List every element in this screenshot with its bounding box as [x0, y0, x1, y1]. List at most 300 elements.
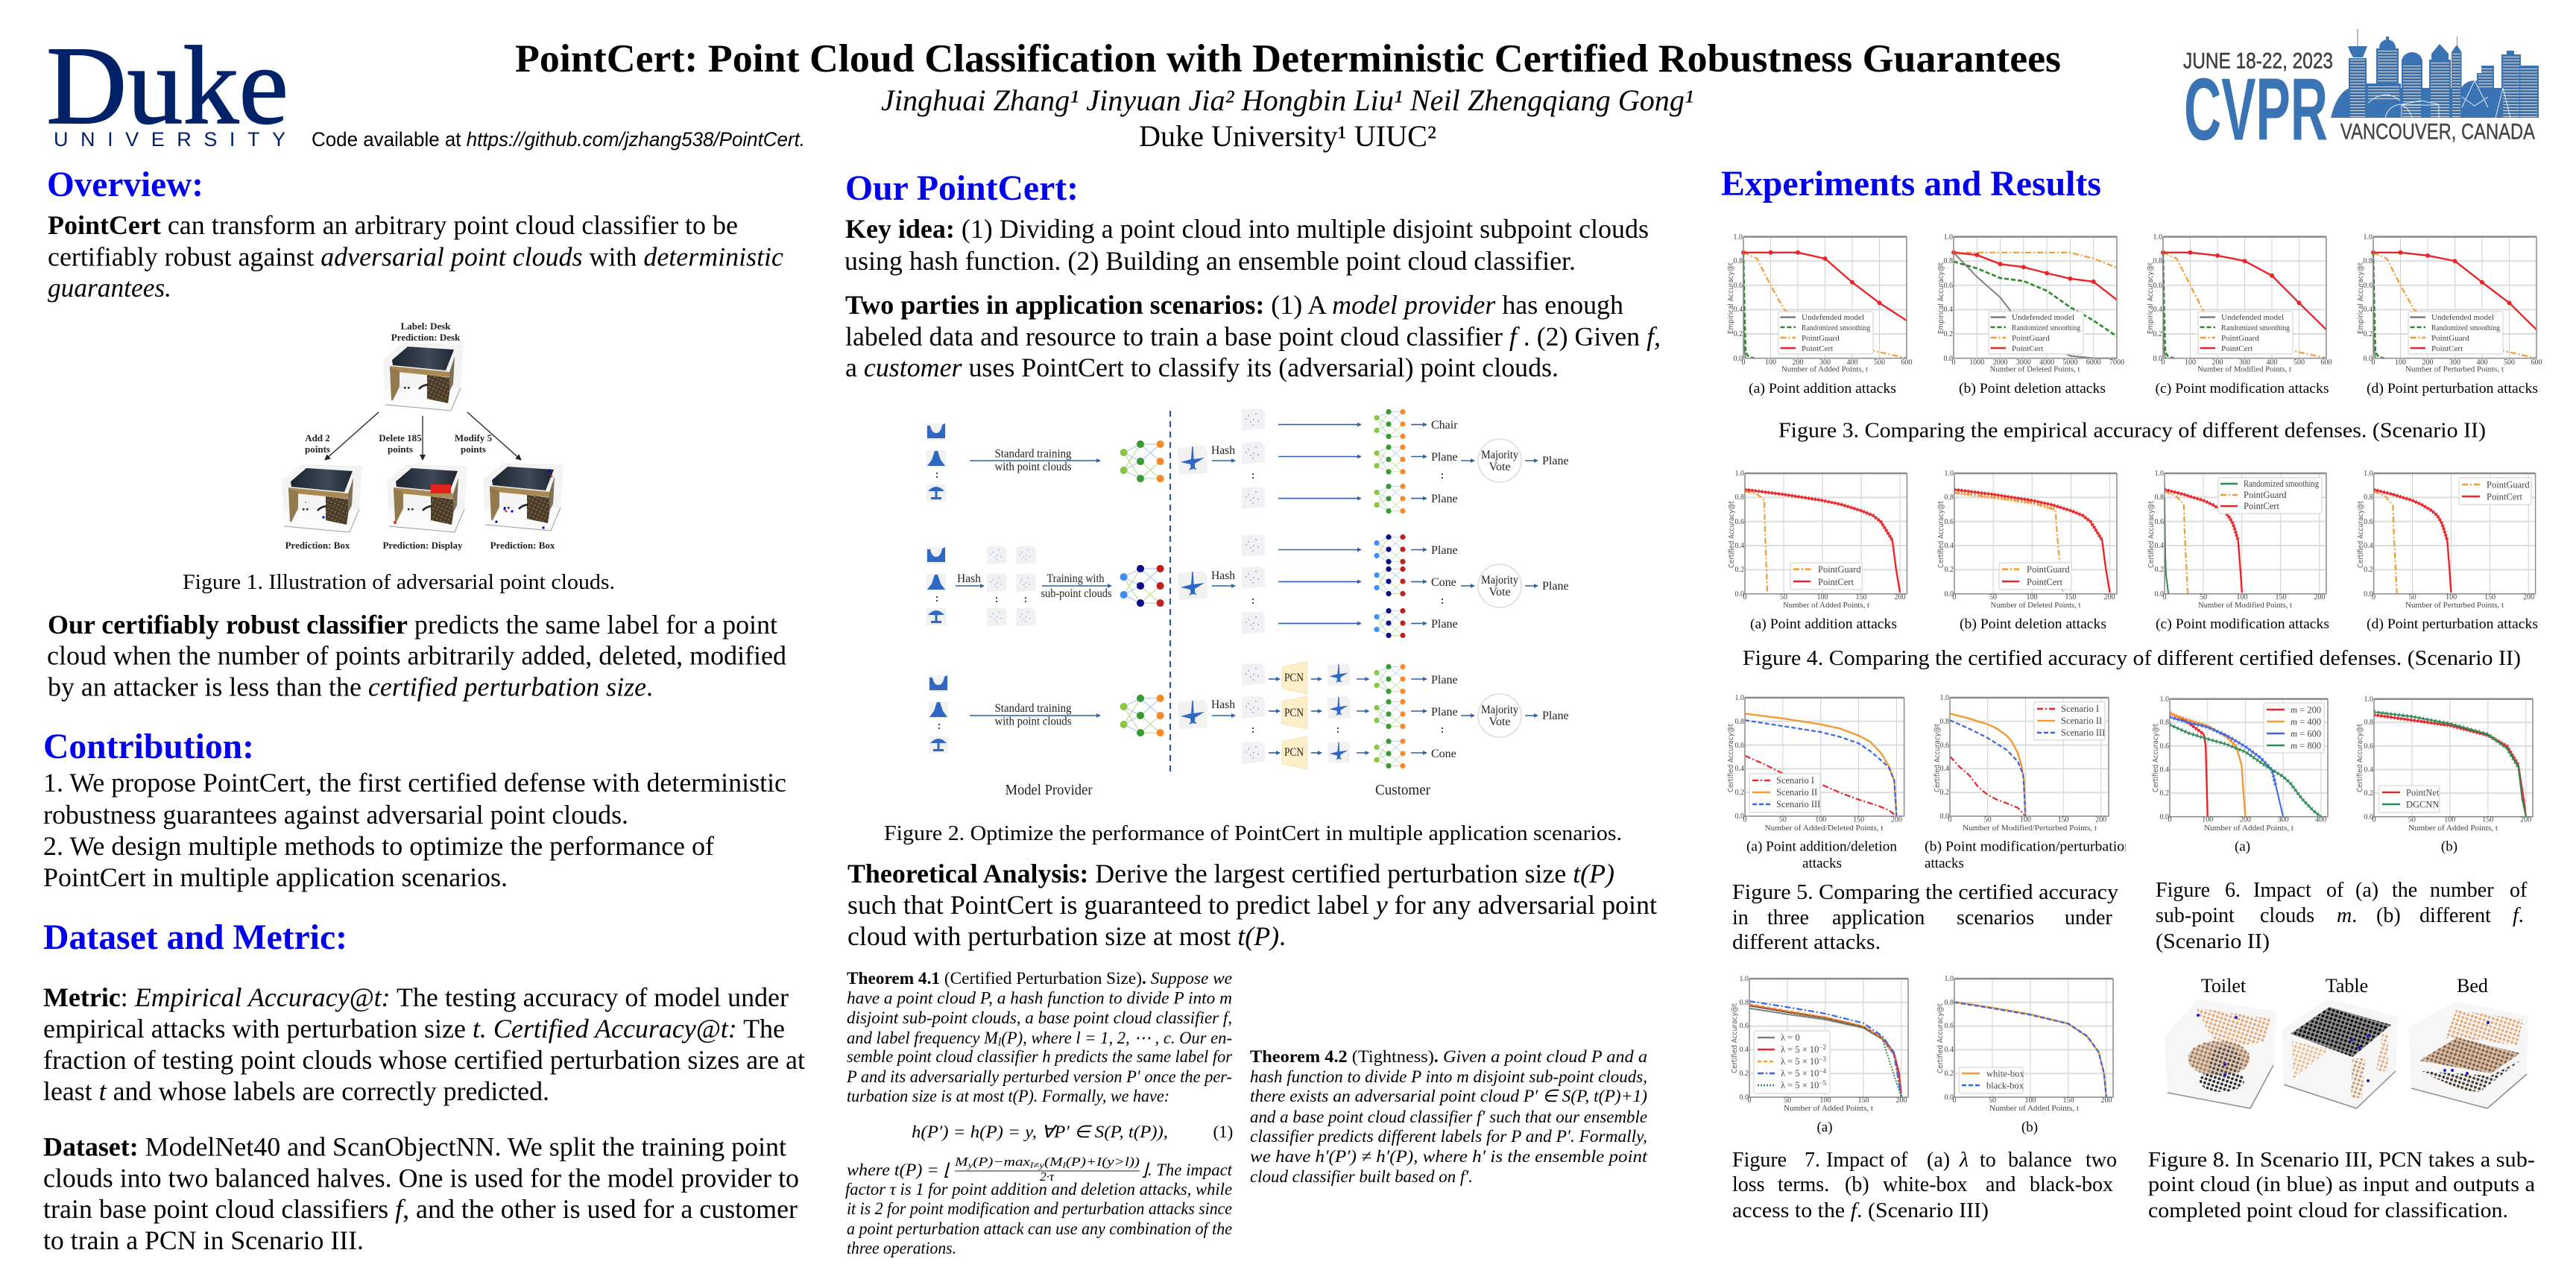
chart: 4d point perturbation: 1.0 [2364, 470, 2373, 478]
theorem 4.2: we have h′(P′) ≠ h′(P), where h′ is the ensemble point [1250, 1147, 1648, 1166]
chart: 7b white-box black-box: Certified Accuracy@t [1936, 1003, 1945, 1073]
sub-captions: figure 4: (a) Point addition attacks [1750, 616, 1897, 632]
chart: 7a lambda: 1.0 [1740, 975, 1749, 983]
caption: figure 6: the [2392, 879, 2417, 902]
chart: 6b classifier f: 200 [2520, 816, 2531, 824]
caption: figure 7: access to the f. (Scenario III) [1732, 1199, 1989, 1222]
chart: 4b point deletion: Number of Deleted Points, t [1990, 602, 2081, 610]
chart: 4d point perturbation: Certified Accuracy@t [2357, 501, 2365, 568]
chart: 3c point modification: 500 [2294, 359, 2305, 367]
sub-captions: figure 5: attacks [1802, 856, 1842, 871]
sub-captions: figure 4: (d) Point perturbation attacks [2367, 616, 2538, 632]
chart: 7b white-box black-box: 0.6 [1944, 1022, 1954, 1030]
title: PointCert: Point Cloud Classification with Deterministic Certified Robustness Guarantees [515, 37, 2061, 80]
chart: 7a lambda: 0.6 [1740, 1022, 1749, 1030]
chart: 7a lambda: 0.8 [1740, 999, 1749, 1007]
chart: 4c point modification: 0.2 [2154, 566, 2164, 574]
legend: −3 [1819, 1055, 1826, 1063]
chart: 3b point deletion: 0.4 [1944, 306, 1953, 314]
chart: 5b modification/perturbation: 100 [2020, 816, 2031, 824]
chart: 6a sub-point clouds m: 0 [2168, 816, 2172, 824]
panel: overview [47, 165, 786, 702]
figure 1: adversarial point clouds diagram: Prediction: Desk [391, 332, 461, 343]
chart: 4a point addition [1728, 470, 1907, 610]
text: two parties: labeled data and resource to train a base point cloud classifier f . (2) Given f, [845, 322, 1661, 352]
point cloud: table [2282, 975, 2399, 1108]
legend: Scenario II [2061, 716, 2102, 726]
chart: 4b point deletion [1937, 470, 2117, 610]
figure 1: adversarial point clouds diagram [282, 321, 564, 551]
legend: −2 [1819, 1044, 1826, 1051]
caption: figure 6: number [2430, 879, 2494, 902]
legend: Undefended model [1802, 313, 1864, 322]
chart: 3c point modification: 200 [2212, 359, 2223, 367]
chart: 7b white-box black-box: 0 [1953, 1096, 1956, 1105]
row: scenario II: Hash [957, 572, 981, 585]
legend: m = 800 [2291, 741, 2321, 751]
logo: Duke University: Duke [46, 24, 288, 148]
caption: figure 7: white-box [1883, 1173, 1968, 1196]
chart: 5b modification/perturbation: 50 [1984, 816, 1992, 824]
chart: 5b modification/perturbation: 0.6 [1939, 742, 1949, 750]
caption: figure 6: 6. [2225, 879, 2241, 902]
desk: add 2 points [282, 464, 362, 532]
row: scenario II: Plane [1542, 580, 1569, 593]
theorem 4.1: (P), where l = 1, 2, ⋯ , c. Our en- [1001, 1029, 1232, 1047]
equation: t(P) fraction: (P)−max [973, 1155, 1031, 1169]
legend: Undefended model [2221, 313, 2284, 322]
row: scenario I [926, 408, 1569, 514]
logo: CVPR 2023 Vancouver [2183, 29, 2539, 160]
heading: contribution: Contribution: [43, 727, 254, 766]
theorem 4.2 [1250, 1047, 1648, 1186]
figure 1: adversarial point clouds diagram: Modify 5 [455, 432, 493, 443]
figure 6: impact of m and f charts [2152, 695, 2533, 855]
sub-captions: figure 5: (a) Point addition/deletion [1746, 839, 1898, 855]
sub-captions: figure 4 [1750, 616, 2538, 632]
chart: 5b modification/perturbation: 0.4 [1939, 765, 1949, 773]
legend: −5 [1819, 1079, 1826, 1087]
legend: λ = 0 [1781, 1032, 1800, 1043]
chart: 3a point addition: 500 [1874, 359, 1885, 367]
equation: t(P) fraction: l≠y [1030, 1160, 1045, 1170]
legend: −4 [1819, 1067, 1826, 1075]
caption: figure 7: loss [1732, 1173, 1765, 1196]
legend: λ = 5 × 10 [1781, 1044, 1819, 1055]
chart: 3b point deletion: 6000 [2086, 359, 2101, 367]
chart: 4a point addition: 50 [1780, 593, 1787, 602]
row: scenario I: Plane [1431, 451, 1458, 464]
chart: 4d point perturbation: 0.4 [2364, 542, 2373, 550]
caption: figure 5 [1732, 881, 2118, 954]
theorem 4.1: it is 2 for point modification and perturbation attacks since [847, 1199, 1232, 1218]
chart: 3d point perturbation: 0.6 [2363, 282, 2373, 290]
caption: figure 2: Figure 2. Optimize the performance of PointCert in multiple application scenarios. [884, 822, 1622, 845]
chart: 4d point perturbation: 0 [2372, 593, 2375, 602]
chart: 4c point modification: 0.0 [2154, 590, 2164, 599]
chart: 3a point addition: Number of Added Points, t [1781, 366, 1868, 374]
row: scenario III: Standard training [994, 702, 1072, 715]
chart: 3b point deletion: 0.8 [1944, 257, 1953, 265]
legend: PointCert [1802, 344, 1833, 353]
chart: 4c point modification: 0.8 [2154, 493, 2164, 502]
caption: figure 6: of [2326, 879, 2344, 902]
legend: PointGuard [1818, 564, 1861, 575]
chart: 5b modification/perturbation: 0.0 [1939, 812, 1949, 821]
text: certifiably robust classifier: by an attacker is less than the certified perturbation size. [48, 672, 653, 702]
chart: 5a addition/deletion: 0.2 [1735, 789, 1744, 797]
caption: figure 6: (Scenario II) [2156, 930, 2270, 953]
caption: figure 7: balance [2008, 1149, 2072, 1172]
chart: 4c point modification: 150 [2275, 593, 2287, 602]
legend: Undefended model [2431, 313, 2494, 322]
sub-captions: figure 4: (b) Point deletion attacks [1960, 616, 2106, 632]
figure 1: adversarial point clouds diagram: Prediction: Display [382, 540, 463, 551]
heading: overview: Overview: [47, 165, 203, 204]
sub-captions: figure 4: (c) Point modification attacks [2156, 616, 2329, 632]
chart: 5b modification/perturbation: Number of Modified/Perturbed Points, t [1963, 824, 2097, 833]
chart: 3b point deletion: 7000 [2109, 359, 2124, 367]
equation: t(P) fraction: y [967, 1160, 973, 1170]
legend: Scenario III [1776, 799, 1820, 809]
legend: DGCNN [2406, 799, 2439, 809]
chart: 4a point addition: 150 [1856, 593, 1866, 602]
chart: 7a lambda: 0.0 [1740, 1093, 1749, 1102]
text: dataset: clouds into two balanced halves. One is used for the model provider to [43, 1163, 799, 1193]
chart: 6b classifier f: 0.6 [2364, 742, 2373, 751]
chart: 4d point perturbation: 0.6 [2364, 518, 2373, 526]
theorem 4.1: ⌋. The impact [1141, 1161, 1233, 1179]
chart: 4b point deletion: 200 [2103, 593, 2115, 602]
chart: 4b point deletion: 50 [1989, 593, 1997, 602]
chart: 3c point modification [2147, 233, 2332, 374]
heading: dataset and metric: Dataset and Metric: [43, 918, 347, 957]
legend [2379, 786, 2440, 812]
sub-captions: figure 3: (a) Point addition attacks [1749, 381, 1896, 397]
figure 2: application scenarios diagram: Customer [1375, 782, 1430, 798]
chart: 4b point deletion: 0.2 [1944, 566, 1954, 574]
chart: 3b point deletion: 5000 [2062, 359, 2077, 367]
text: theoretical analysis: such that PointCert is guaranteed to predict label y for any adversarial point [847, 890, 1657, 920]
chart: 6a sub-point clouds m: 0.2 [2160, 789, 2169, 798]
chart: 5a addition/deletion: 0.6 [1735, 742, 1744, 750]
row: scenario I: Hash [1211, 444, 1235, 457]
chart: 4b point deletion: Certified Accuracy@t [1937, 501, 1945, 568]
equation: t(P) fraction: (M [1044, 1155, 1064, 1169]
legend: Scenario I [2061, 704, 2099, 714]
figure 7: lambda and access charts [1731, 975, 2113, 1135]
chart: 6a sub-point clouds m: 0.0 [2160, 813, 2169, 821]
figure 1: adversarial point clouds diagram: Prediction: Box [285, 540, 350, 551]
caption: figure 5: Figure 5. Comparing the certified accuracy [1732, 881, 2118, 904]
legend: PointGuard [2012, 334, 2050, 343]
caption: figure 7: of [1890, 1149, 1908, 1172]
sub-captions: figure 5 [1747, 841, 2126, 868]
legend: PointNet [2406, 787, 2440, 798]
caption: figure 6: clouds [2260, 904, 2314, 927]
chart: 6a sub-point clouds m: 0.6 [2160, 742, 2169, 751]
chart: 3a point addition: 600 [1901, 359, 1913, 367]
chart: 7b white-box black-box: 0.2 [1944, 1070, 1954, 1078]
chart: 3c point modification: 0.4 [2153, 306, 2162, 314]
chart: 3a point addition: Empirical Accuracy@t [1727, 262, 1735, 334]
chart: 5b modification/perturbation: 0.8 [1939, 718, 1949, 726]
theorem 4.1: three operations. [847, 1239, 956, 1257]
sub-captions: figure 6: (a) [2235, 839, 2250, 855]
text: overview description: certifiably robust against adversarial point clouds with deterministic [48, 242, 783, 271]
chart: 6a sub-point clouds m: 100 [2202, 816, 2213, 824]
chart: 3c point modification: 400 [2266, 359, 2278, 367]
chart: 3c point modification: Empirical Accuracy@t [2147, 262, 2155, 334]
text: overview description: guarantees. [48, 273, 171, 303]
chart: 4d point perturbation: 0.0 [2364, 590, 2373, 599]
caption: figure 7: λ [1959, 1149, 1969, 1172]
chart: 7b white-box black-box: 200 [2100, 1096, 2112, 1105]
text: certifiably robust classifier: Our certifiably robust classifier predicts the same label for a point [48, 610, 777, 640]
chart: 7a lambda: 150 [1857, 1096, 1869, 1105]
figure 2: application scenarios diagram [926, 408, 1569, 798]
chart: 6b classifier f: 0.0 [2364, 813, 2373, 821]
row: scenario II: Plane [1431, 544, 1458, 557]
caption: figure 6: . [2519, 904, 2524, 927]
chart: 5a addition/deletion: 100 [1815, 816, 1826, 824]
text: overview description: PointCert can transform an arbitrary point cloud classifier to be [48, 210, 738, 240]
legend: PointGuard [2244, 490, 2287, 500]
chart: 6b classifier f: 0.2 [2364, 789, 2373, 798]
chart: 6b classifier f: 0.8 [2364, 719, 2373, 727]
chart: 7b white-box black-box: Number of Added Points, t [1989, 1105, 2079, 1113]
chart: 4d point perturbation: 200 [2523, 593, 2534, 602]
theorem 4.2: hash function to divide P into m disjoint sub-point clouds, [1250, 1067, 1647, 1086]
sub-captions: figure 7: (b) [2021, 1120, 2038, 1135]
caption: figure 7: to [1980, 1149, 1996, 1172]
chart: 4c point modification: 0 [2163, 593, 2166, 602]
legend: PointCert [1818, 577, 1854, 587]
text: dataset [43, 1131, 799, 1255]
chart: 7b white-box black-box: 0.4 [1944, 1046, 1954, 1054]
text: metric: least t and whose labels are correctly predicted. [43, 1076, 549, 1106]
sub-captions: figure 3 [1749, 381, 2538, 397]
chart: 5a addition/deletion: 1.0 [1735, 694, 1744, 702]
caption: figure 7: 7. [1805, 1149, 1820, 1172]
chart: 3a point addition: 400 [1847, 359, 1857, 367]
chart: 3d point perturbation: 500 [2504, 359, 2515, 367]
legend: Scenario I [1776, 775, 1814, 786]
row: scenario III: PCN [1284, 672, 1304, 684]
text: contribution list: 1. We propose PointCert, the first certified defense with deterministic [43, 768, 786, 798]
chart: 3b point deletion: 2000 [1993, 359, 2008, 367]
chart: 3c point modification: 0 [2162, 359, 2165, 367]
chart: 4c point modification: 0.4 [2154, 542, 2164, 550]
caption: figure 5: in [1732, 906, 1749, 929]
text: certifiably robust classifier: cloud when the number of points arbitrarily added, deleted, modified [47, 641, 786, 671]
chart: 6b classifier f: 50 [2408, 816, 2416, 824]
vote: majority vote: Majority [1481, 574, 1518, 587]
row: scenario III: with point clouds [994, 716, 1072, 727]
caption: figure 8: completed point cloud for classification. [2148, 1199, 2508, 1222]
chart: 3a point addition: 100 [1765, 359, 1776, 367]
chart: 3c point modification: 100 [2185, 359, 2196, 367]
chart: 4c point modification: 200 [2314, 593, 2326, 602]
chart: 3d point perturbation: Number of Perturbed Points, t [2405, 366, 2504, 374]
row: scenario III [929, 661, 1569, 769]
caption: figure 7: Impact [1826, 1149, 1884, 1172]
chart: 4c point modification [2147, 470, 2326, 610]
chart: 3b point deletion: 4000 [2039, 359, 2054, 367]
figure 1: adversarial point clouds diagram: Delete 185 [379, 432, 422, 443]
vote: majority vote [1478, 694, 1521, 737]
vote: majority vote [1478, 439, 1521, 482]
text: certifiably robust classifier [47, 610, 786, 702]
chart: 3b point deletion: 1000 [1969, 359, 1984, 367]
point cloud: table: Table [2326, 975, 2368, 997]
chart: 5b modification/perturbation: 1.0 [1939, 694, 1949, 702]
text: key idea: Key idea: (1) Dividing a point cloud into multiple disjoint subpoint clouds [845, 214, 1649, 244]
chart: 4b point deletion: 0.6 [1944, 518, 1954, 526]
chart: 4d point perturbation: 0.2 [2364, 566, 2373, 574]
text: metric [43, 982, 805, 1106]
equation 1: (1) [1213, 1123, 1233, 1141]
caption: figure 8: Figure 8. In Scenario III, PCN takes a sub- [2148, 1149, 2535, 1172]
chart: 6b classifier f: Number of Added Points, t [2408, 824, 2498, 833]
point cloud: toilet [2165, 975, 2276, 1108]
chart: 4b point deletion: 0.4 [1944, 542, 1954, 550]
figure 3: empirical accuracy charts [1727, 233, 2542, 397]
chart: 5a addition/deletion: Number of Added/Deleted Points, t [1765, 824, 1884, 833]
chart: 7a lambda: Number of Added Points, t [1784, 1105, 1873, 1113]
chart: 3d point perturbation: 0.8 [2363, 257, 2373, 265]
legend [2408, 312, 2503, 354]
chart: 5b modification/perturbation: 200 [2095, 816, 2106, 824]
theorem 4.1: factor τ is 1 for point addition and deletion attacks, while [845, 1180, 1232, 1199]
caption: figure 7: two [2086, 1149, 2117, 1172]
equation: t(P) fraction: 2·τ [1040, 1169, 1055, 1184]
caption: figure 6 [2156, 879, 2528, 953]
text: metric: empirical attacks with perturbation size t. Certified Accuracy@t: The [43, 1014, 785, 1044]
caption: figure 6: Figure [2156, 879, 2210, 902]
legend [1749, 774, 1820, 812]
sub-captions: figure 3: (b) Point deletion attacks [1959, 381, 2106, 397]
legend [1778, 312, 1873, 354]
text: contribution list: robustness guarantees against adversarial point clouds. [43, 800, 628, 830]
text: dataset: to train a PCN in Scenario III. [43, 1225, 364, 1255]
point cloud: bed: Bed [2457, 975, 2488, 997]
chart: 4d point perturbation: 150 [2484, 593, 2496, 602]
chart: 6a sub-point clouds m: Number of Added Points, t [2204, 824, 2294, 833]
chart: 3d point perturbation: 600 [2531, 359, 2542, 367]
legend: PointGuard [2221, 334, 2259, 343]
chart: 6a sub-point clouds m: 400 [2315, 816, 2326, 824]
chart: 4b point deletion: 0.0 [1944, 590, 1954, 599]
text: dataset: train base point cloud classifiers f, and the other is used for a customer [43, 1194, 798, 1224]
theorem 4.1: where t(P) = ⌊ [847, 1161, 950, 1179]
chart: 3b point deletion: 3000 [2016, 359, 2031, 367]
chart: 7a lambda: 0.2 [1740, 1070, 1749, 1078]
text: key idea: using hash function. (2) Building an ensemble point cloud classifier. [845, 246, 1576, 276]
chart: 3d point perturbation: 300 [2449, 359, 2460, 367]
affiliations: Duke University¹ UIUC² [1139, 119, 1436, 153]
chart: 7a lambda: 100 [1820, 1096, 1831, 1105]
caption: figure 4: Figure 4. Comparing the certified accuracy of different certified defenses. (Scenario II) [1743, 647, 2521, 670]
sub-captions: figure 6: (b) [2441, 839, 2457, 855]
chart: 3c point modification: 600 [2321, 359, 2332, 367]
legend [2459, 478, 2531, 505]
caption: figure 5: three [1767, 906, 1809, 929]
legend: Randomized smoothing [2221, 323, 2290, 332]
chart: 4a point addition: 0.4 [1735, 542, 1744, 550]
legend: PointCert [2012, 344, 2043, 353]
legend [1754, 1031, 1830, 1093]
panel: dataset and metric [43, 918, 805, 1255]
text: theoretical analysis [847, 859, 1657, 951]
chart: 3d point perturbation: 200 [2422, 359, 2433, 367]
caption: figure 1: Figure 1. Illustration of adversarial point clouds. [183, 571, 615, 594]
chart: 5a addition/deletion: 200 [1891, 816, 1902, 824]
legend [1999, 563, 2071, 590]
theorem 4.1 [845, 969, 1233, 1257]
row: scenario I: Chair [1431, 419, 1458, 432]
chart: 6a sub-point clouds m: 200 [2240, 816, 2251, 824]
equation 1: h(P′) = h(P) = y, ∀P′ ∈ S(P, t(P)), [912, 1123, 1168, 1141]
theorem 4.2: and a base point cloud classifier f′ such that our ensemble [1250, 1108, 1647, 1126]
chart: 7b white-box black-box: 150 [2063, 1096, 2074, 1105]
code link: Code available at https://github.com/jzhang538/PointCert. [312, 128, 805, 151]
chart: 4d point perturbation [2357, 470, 2536, 610]
chart: 3c point modification: 0.6 [2153, 282, 2162, 290]
theorem 4.2: classifier predicts different labels for P and P′. Formally, [1250, 1127, 1647, 1146]
row: scenario III: Plane [1431, 674, 1458, 686]
theorem 4.1: semble point cloud classifier h predicts the same label for [847, 1047, 1233, 1066]
legend: Randomized smoothing [2244, 479, 2320, 489]
vote: majority vote: Majority [1481, 704, 1518, 716]
caption: figure 7: Figure [1732, 1149, 1787, 1172]
chart: 3a point addition: 0.0 [1734, 355, 1743, 363]
caption: figure 3: Figure 3. Comparing the empirical accuracy of different defenses. (Scenario II) [1778, 420, 2486, 443]
legend [1790, 563, 1862, 590]
legend: PointGuard [2431, 334, 2469, 343]
legend: m = 600 [2291, 729, 2321, 739]
chart: 4a point addition: 0 [1743, 593, 1747, 602]
row: scenario II: Training with [1046, 572, 1105, 585]
row: scenario III: Hash [1211, 698, 1235, 711]
row: scenario III: PCN [1284, 707, 1304, 719]
logo: CVPR 2023 Vancouver: JUNE 18-22, 2023 [2183, 49, 2333, 74]
legend: Scenario III [2061, 727, 2105, 738]
text: two parties: a customer uses PointCert to classify its (adversarial) point clouds. [845, 353, 1559, 382]
divider: model provider / customer [1169, 411, 1171, 772]
legend: PointGuard [2487, 480, 2530, 490]
chart: 3b point deletion: Number of Deleted Points, t [1990, 366, 2080, 374]
chart: 5b modification/perturbation: 0 [1948, 816, 1951, 824]
chart: 7b white-box black-box: 100 [2024, 1096, 2036, 1105]
legend: white-box [1986, 1069, 2024, 1079]
chart: 3c point modification: 0.0 [2153, 355, 2162, 363]
caption: figure 7: (b) [1845, 1173, 1869, 1196]
chart: 3b point deletion: 0.0 [1944, 355, 1953, 363]
chart: 3b point deletion: Empirical Accuracy@t [1937, 262, 1945, 334]
chart: 6b classifier f: 0.4 [2364, 766, 2373, 774]
legend [2264, 703, 2324, 753]
chart: 4b point deletion: 150 [2065, 593, 2077, 602]
figure 1: adversarial point clouds diagram: Label: Desk [401, 321, 451, 332]
chart: 4a point addition: 0.0 [1735, 590, 1744, 599]
chart: 5a addition/deletion: 150 [1853, 816, 1864, 824]
chart: 3d point perturbation: 0.4 [2363, 306, 2373, 314]
legend: Scenario II [1776, 787, 1817, 798]
equation: t(P) fraction: M [955, 1155, 965, 1169]
legend: PointGuard [1802, 334, 1840, 343]
row: scenario III: Plane [1542, 710, 1569, 722]
